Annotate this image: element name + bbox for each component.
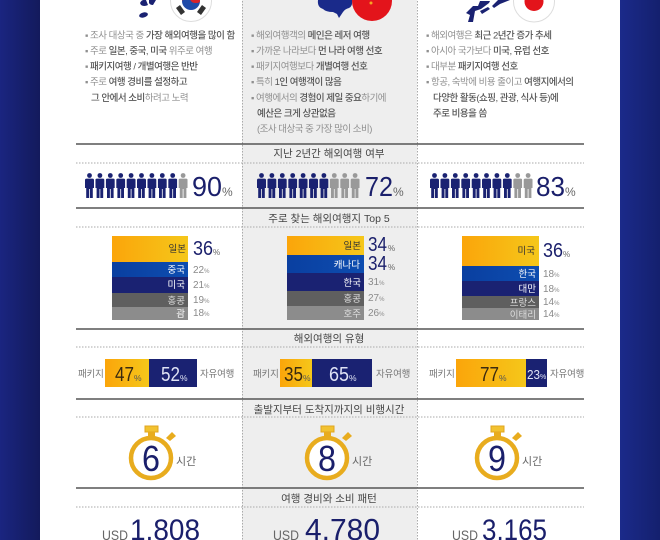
text: Japan bullets: ▪ 항공, 숙박에 비용 줄이고 여행지에서의 [426, 76, 574, 88]
chart: China top 5: 34 [368, 234, 387, 256]
chart: Japan top 5: 대만 [519, 284, 536, 295]
chart: Korea travel type: % [180, 373, 188, 383]
chart: Japan top 5 [462, 236, 570, 321]
chart: China top 5: 호주 [344, 309, 361, 320]
text: Japan bullets: ▪ 아시아 국가보다 미국, 유럽 선호 [426, 45, 550, 57]
chart: Japan top 5: 미국 [518, 246, 535, 257]
chart: Korea travel type: 자유여행 [200, 368, 234, 380]
heading: top 5 destinations: 주로 찾는 해외여행지 Top 5 [268, 212, 390, 225]
heading: expense pattern: 여행 경비와 소비 패턴 [281, 492, 377, 505]
icon: Japan flag [514, 0, 554, 22]
chart: China top 5: 27% [368, 293, 385, 304]
chart: China top 5: 일본 [344, 241, 361, 252]
icon: China map [318, 0, 352, 18]
chart: Korea top 5: 미국 [168, 280, 185, 291]
icon: stopwatch 8 hours: 시간 [352, 455, 372, 468]
panel: Japan intro [426, 0, 574, 120]
chart: Korea top 5: 18% [193, 308, 210, 319]
chart: Korea travel type: 패키지 [78, 369, 104, 380]
chart: China travel type: 자유여행 [376, 368, 410, 380]
stat: Japan budget [452, 514, 547, 540]
chart: China travel type: % [349, 373, 357, 383]
chart: China top 5: 34 [368, 253, 387, 275]
text: Korea bullets [85, 30, 235, 104]
chart: China top 5: 캐나다 [334, 260, 360, 271]
text: Japan bullets: 주로 비용을 씀 [433, 108, 487, 120]
chart: Japan top 5: 이태리 [510, 310, 536, 321]
center column background [242, 0, 417, 540]
chart: China 72 percent people [257, 171, 404, 202]
chart: Japan top 5: 14% [543, 297, 560, 308]
chart: Japan travel type: % [540, 374, 546, 381]
chart: Korea travel type [78, 359, 234, 387]
chart: Japan top 5: 18% [543, 284, 560, 295]
chart: Japan travel type: 패키지 [429, 369, 455, 380]
text: China bullets: ▪ 해외여행객의 메인은 레저 여행 [251, 30, 370, 42]
icon: Korea flag [170, 0, 212, 22]
chart: Korea top 5: 36 [193, 238, 213, 260]
chart: Korea travel type: % [134, 373, 142, 383]
chart: China top 5: % [388, 263, 395, 272]
chart: China top 5: 26% [368, 308, 385, 319]
chart: Korea top 5: 22% [193, 265, 210, 276]
heading: flight time: 출발지부터 도착지까지의 비행시간 [254, 404, 405, 416]
chart: Japan 83 percent people [430, 171, 576, 202]
text: China bullets: (조사 대상국 중 가장 많이 소비) [257, 124, 372, 135]
text: Japan bullets: ▪ 대부분 패키지여행 선호 [426, 60, 518, 72]
heading: overseas trips: 지난 2년간 해외여행 여부 [273, 147, 385, 160]
chart: China top 5: 홍콩 [344, 293, 361, 305]
chart: Japan travel type: % [499, 373, 507, 383]
panel: China intro [251, 0, 392, 135]
icon: Korea map [139, 0, 156, 19]
chart: Japan travel type: 23 [527, 367, 540, 382]
chart: China travel type: 35 [284, 364, 303, 386]
side band left [0, 0, 40, 540]
stat: China budget [273, 512, 380, 540]
text: China bullets: ▪ 여행에서의 경험이 제일 중요하기에 [251, 92, 386, 104]
stat: Korea budget [102, 514, 200, 540]
chart: Japan top 5: 프랑스 [510, 297, 536, 309]
text: Korea bullets: 그 안에서 소비하려고 노력 [91, 92, 188, 104]
icon: China flag [352, 0, 392, 21]
icon: stopwatch 9 hours: 9 [488, 438, 506, 479]
chart: China 72 percent people: % [393, 185, 404, 199]
chart: Korea 90 percent people: % [222, 185, 233, 199]
chart: Japan top 5: 한국 [519, 269, 536, 280]
chart: Korea top 5: 중국 [168, 265, 185, 276]
icon: stopwatch 6 hours: 6 [142, 438, 160, 479]
chart: Japan travel type: 77 [480, 364, 499, 386]
chart: Korea 90 percent people [85, 171, 233, 202]
icon: stopwatch 6 hours [131, 426, 196, 479]
heading: travel type: 해외여행의 유형 [294, 332, 364, 345]
chart: China top 5: % [388, 244, 395, 253]
chart: China top 5: 31% [368, 277, 385, 288]
text: Korea bullets: ▪ 조사 대상국 중 가장 해외여행을 많이 함 [85, 30, 235, 42]
chart: Korea top 5: 19% [193, 295, 210, 306]
text: Japan bullets [426, 30, 574, 120]
panel: Korea intro [85, 0, 235, 104]
text: China bullets: ▪ 패키지여행보다 개별여행 선호 [251, 60, 368, 72]
chart: Japan top 5: 14% [543, 309, 560, 320]
icon: Japan map [466, 0, 510, 22]
icon: stopwatch 9 hours [477, 426, 542, 479]
text: Korea bullets: ▪ 주로 일본, 중국, 미국 위주로 여행 [85, 45, 212, 57]
icon: stopwatch 9 hours: 시간 [522, 455, 542, 468]
chart: China 72 percent people: 72 [365, 171, 393, 202]
chart: Korea 90 percent people: 90 [192, 171, 222, 202]
text: China bullets: ▪ 가까운 나라보다 먼 나라 여행 선호 [251, 45, 383, 57]
chart: China top 5 [287, 234, 395, 320]
side band right [620, 0, 660, 540]
text: China bullets: 예산은 크게 상관없음 [257, 108, 336, 120]
icon: stopwatch 8 hours: 8 [318, 438, 336, 479]
chart: China travel type: % [303, 373, 311, 383]
chart: Korea top 5: 홍콩 [168, 295, 185, 307]
chart: Japan top 5: 18% [543, 269, 560, 280]
icon: stopwatch 6 hours: 시간 [176, 455, 196, 468]
text: Japan bullets: ▪ 해외여행은 최근 2년간 증가 추세 [426, 30, 551, 42]
chart: Japan 83 percent people: % [565, 185, 576, 199]
icon: stopwatch 8 hours [307, 426, 372, 479]
text: Japan bullets: 다양한 활동(쇼핑, 관광, 식사 등)에 [433, 92, 558, 104]
chart: Japan top 5: % [563, 250, 570, 259]
chart: Korea top 5: 일본 [169, 244, 186, 255]
chart: Korea travel type: 52 [161, 364, 180, 386]
chart: Korea top 5: 21% [193, 280, 210, 291]
text: China bullets: ▪ 특히 1인 여행객이 많음 [251, 76, 342, 88]
text: Korea bullets: ▪ 패키지여행 / 개별여행은 반반 [85, 60, 198, 72]
chart: China top 5: 한국 [344, 278, 361, 289]
text: China bullets [251, 30, 386, 135]
text: Korea bullets: ▪ 주로 여행 경비를 설정하고 [85, 76, 188, 88]
chart: China travel type: 패키지 [253, 369, 279, 380]
chart: Japan 83 percent people: 83 [536, 171, 565, 202]
chart: Korea travel type: 47 [115, 364, 134, 386]
chart: Japan travel type [429, 359, 584, 387]
chart: Korea top 5: % [213, 248, 220, 257]
chart: China travel type: 65 [329, 364, 349, 386]
chart: Korea top 5 [112, 236, 220, 320]
chart: China travel type [253, 359, 410, 387]
chart: Korea top 5: 괌 [176, 308, 185, 320]
chart: Japan top 5: 36 [543, 240, 563, 262]
chart: Japan travel type: 자유여행 [550, 368, 584, 380]
